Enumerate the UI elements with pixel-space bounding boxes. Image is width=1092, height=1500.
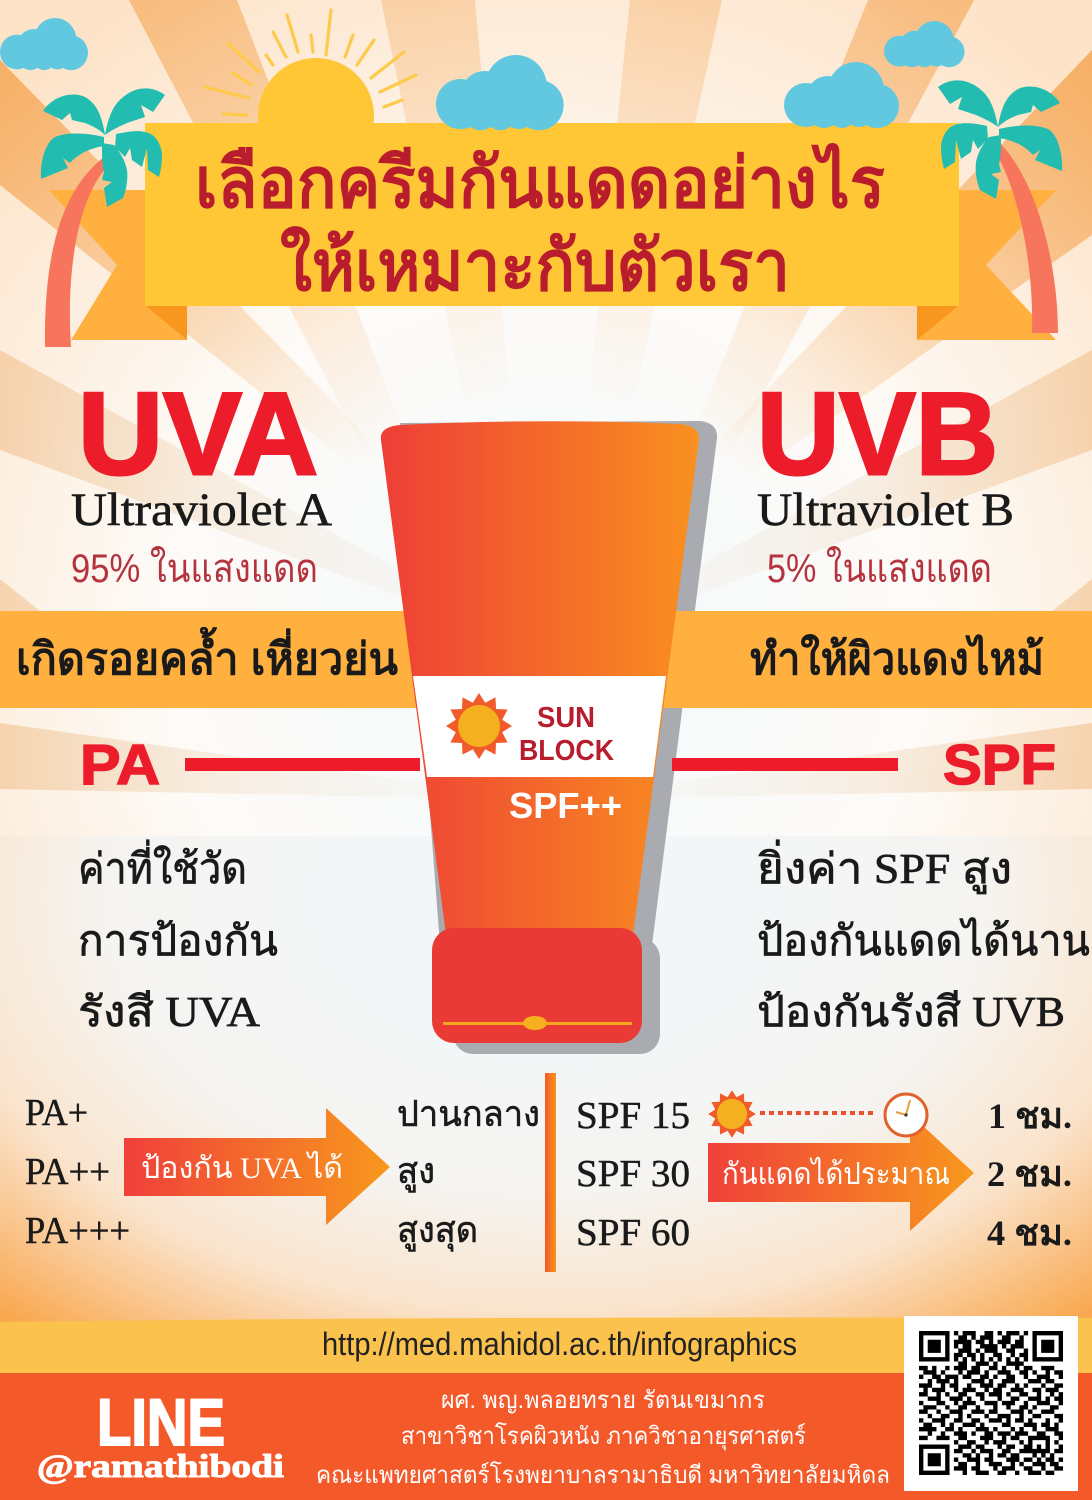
protection levels (397, 1093, 540, 1252)
sun block label: SUN (537, 702, 595, 734)
cloud centre (436, 55, 564, 130)
website url: http://med.mahidol.ac.th/infographics (322, 1326, 797, 1362)
SPF label: SPF (943, 733, 1056, 797)
sun behind banner (205, 10, 416, 174)
icon: sun on label (446, 693, 512, 759)
icon: small sun (708, 1090, 756, 1138)
PA explanation (78, 840, 278, 1036)
UVA heading: UVA (78, 368, 318, 499)
SPF explanation: ยิ่งค่า SPF สูง (757, 840, 1012, 894)
PA label: PA (80, 733, 160, 797)
PA levels (25, 1092, 130, 1252)
PA explanation: รังสี UVA (78, 990, 261, 1036)
cloud top left (0, 18, 88, 70)
SPF connector line (672, 758, 898, 771)
PA explanation: การป้องกัน (78, 919, 278, 965)
protection levels: สูงสุด (397, 1209, 478, 1252)
duration values: 1 ชม. (988, 1096, 1072, 1136)
title banner (145, 123, 959, 306)
tube cap (432, 928, 642, 1043)
ribbon left tail (49, 190, 187, 340)
LINE label: LINE (97, 1385, 225, 1459)
dotted connector (760, 1111, 877, 1115)
PA levels: PA+ (25, 1092, 88, 1134)
cloud top right (884, 21, 964, 67)
Ultraviolet B: Ultraviolet B (757, 484, 1014, 536)
effect of UVA: เกิดรอยคล้ำ เหี่ยวย่น (16, 626, 398, 684)
tube shadow (400, 421, 717, 1054)
SPF explanation: ป้องกันรังสี UVB (757, 990, 1065, 1036)
tube body (381, 421, 699, 935)
protection levels: ปานกลาง (397, 1093, 540, 1134)
SPF explanation (757, 840, 1090, 1036)
duration values: 2 ชม. (987, 1154, 1072, 1194)
PA connector line (185, 758, 420, 771)
footer credits strip (0, 1373, 1092, 1500)
author credits (316, 1387, 890, 1489)
title text: ให้เหมาะกับตัวเรา (280, 225, 790, 305)
PA explanation: ค่าที่ใช้วัด (78, 840, 247, 893)
QR code (904, 1316, 1078, 1491)
SPF levels: SPF 15 (576, 1095, 690, 1137)
arrow: protects against UVA: ป้องกัน UVA ได้ (141, 1150, 343, 1185)
PA levels: PA+++ (25, 1210, 130, 1252)
duration values: 4 ชม. (987, 1213, 1072, 1253)
PA levels: PA++ (25, 1151, 110, 1193)
LINE account: @ramathibodi (37, 1449, 284, 1485)
SPF levels: SPF 60 (576, 1212, 690, 1254)
author credits: คณะแพทยศาสตร์โรงพยาบาลรามาธิบดี มหาวิทยาลัยมหิดล (316, 1461, 890, 1489)
author credits: สาขาวิชาโรคผิวหนัง ภาควิชาอายุรศาสตร์ (401, 1422, 806, 1451)
sun block label (519, 702, 614, 767)
title text (195, 142, 885, 305)
sunscreen tube (381, 421, 699, 1043)
ribbon right tail (917, 190, 1056, 340)
author credits: ผศ. พญ.พลอยทราย รัตนเขมากร (441, 1387, 765, 1414)
centre divider (545, 1073, 556, 1272)
effect of UVB: ทำให้ผิวแดงไหม้ (750, 633, 1044, 684)
sun block label: BLOCK (519, 735, 614, 767)
palm tree right (938, 80, 1062, 333)
SPF++ text: SPF++ (509, 785, 622, 826)
arrow: sun protection duration (708, 1114, 974, 1231)
tube label (413, 676, 666, 777)
title text: เลือกครีมกันแดดอย่างไร (195, 142, 885, 222)
palm tree left (41, 88, 165, 347)
icon: clock (885, 1094, 927, 1136)
Ultraviolet A: Ultraviolet A (71, 484, 332, 536)
SPF explanation: ป้องกันแดดได้นาน (757, 917, 1090, 965)
arrow: protects against UVA (124, 1108, 390, 1225)
footer website strip (0, 1318, 1092, 1373)
UVB share of sunlight: 5% ในแสงแดด (767, 545, 992, 591)
UVA share of sunlight: 95% ในแสงแดด (71, 545, 318, 591)
protection levels: สูง (397, 1150, 435, 1193)
arrow: sun protection duration: กันแดดได้ประมาณ (722, 1156, 950, 1191)
effect band (0, 611, 1092, 708)
SPF levels: SPF 30 (576, 1153, 690, 1195)
duration values (987, 1096, 1072, 1253)
UVB heading: UVB (757, 368, 998, 499)
cloud right (784, 62, 899, 128)
SPF levels (576, 1095, 690, 1254)
